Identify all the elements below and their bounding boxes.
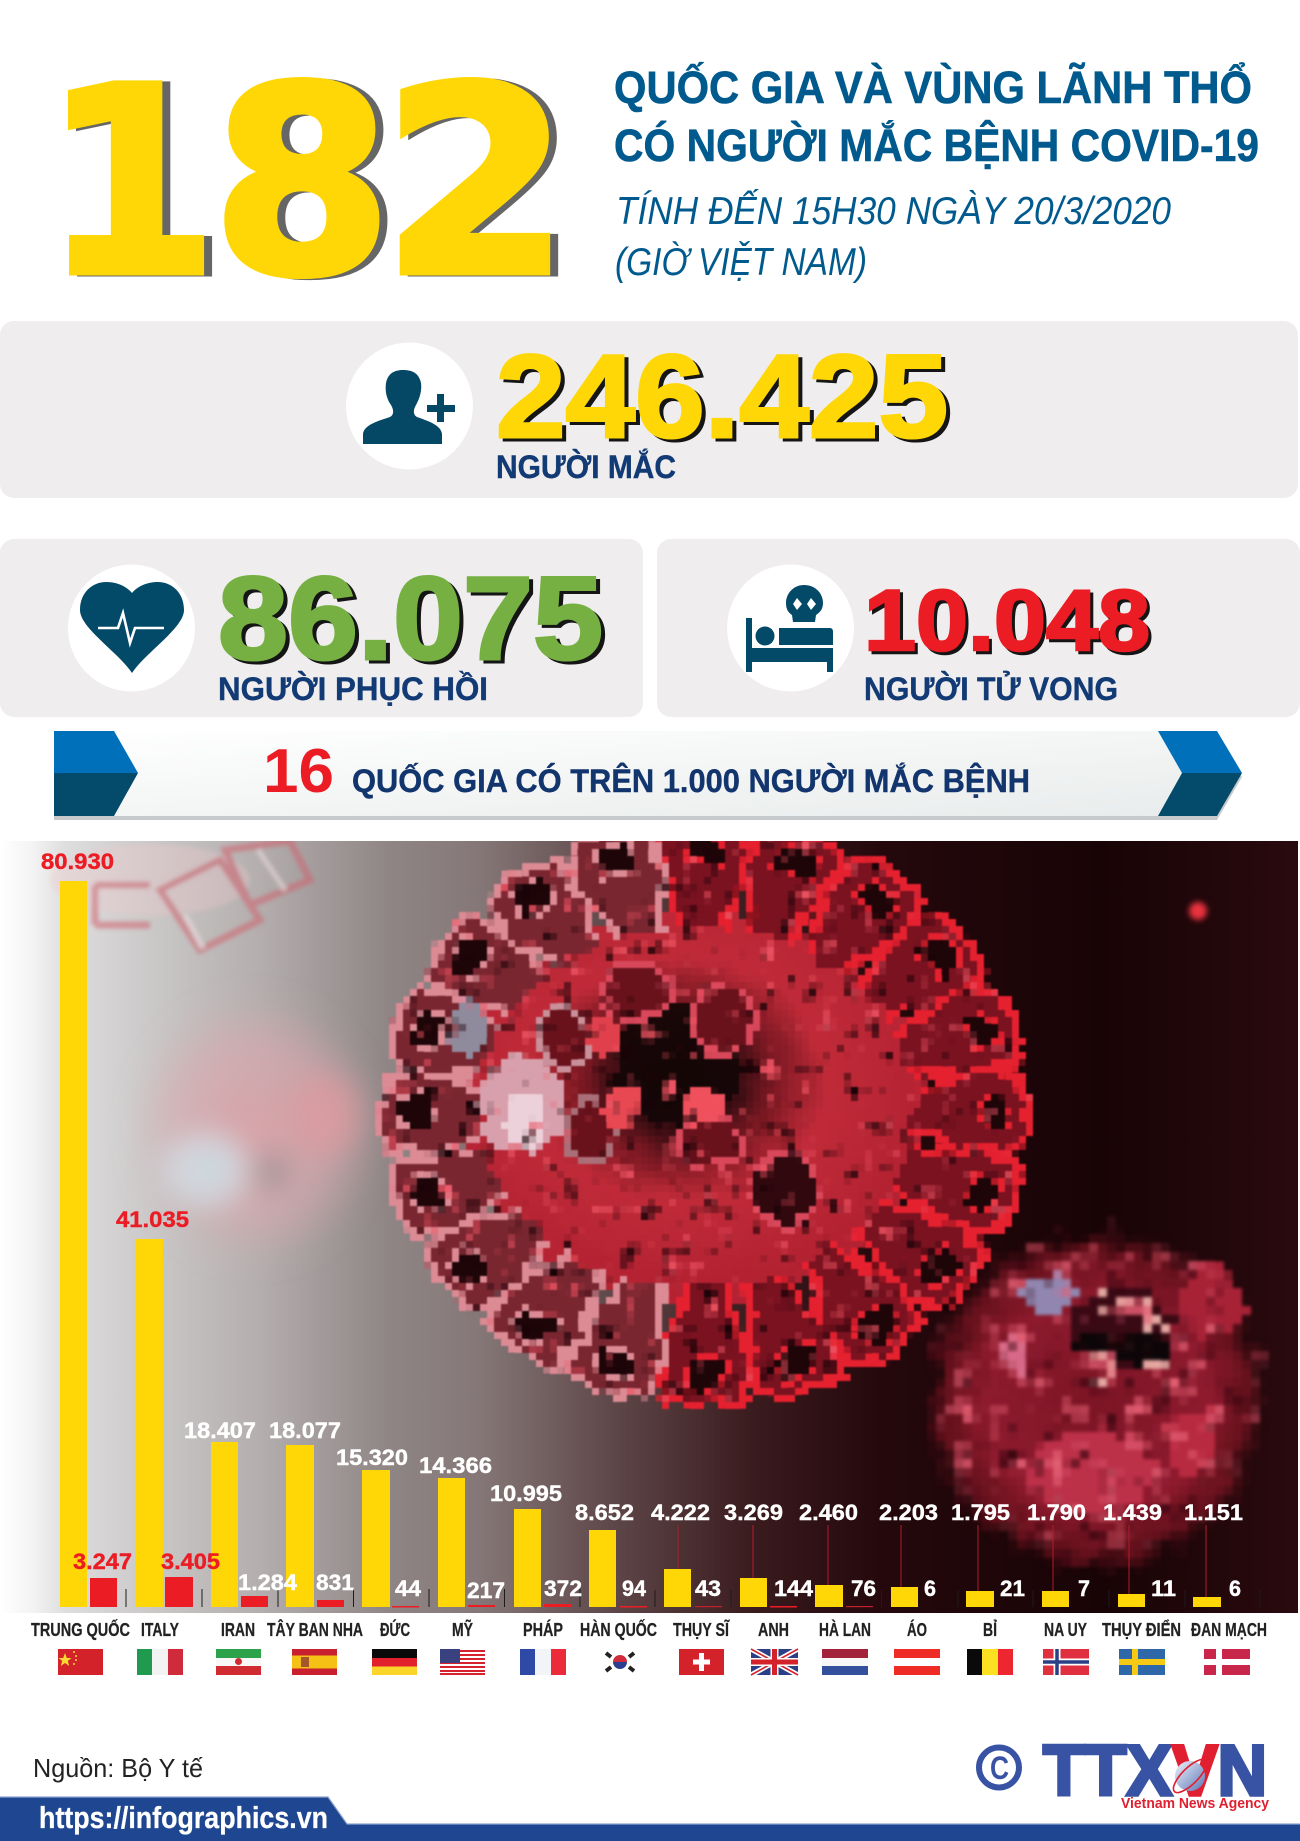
heading text block: QUỐC GIA VÀ VÙNG LÃNH THỔ	[614, 62, 1252, 113]
image: lower right virus	[923, 1228, 1267, 1572]
country labels: HÀ LAN	[819, 1619, 871, 1640]
footer bar	[0, 1797, 1300, 1841]
bar value labels: 1.790	[1027, 1500, 1086, 1525]
source text: Nguồn: Bộ Y tế	[33, 1753, 204, 1783]
virus centre	[612, 1008, 744, 1124]
bar value labels: 4.222	[651, 1500, 710, 1525]
country labels: ĐỨC	[380, 1619, 410, 1640]
bar value labels: 8.652	[575, 1500, 634, 1525]
flag: Sweden	[1119, 1649, 1165, 1675]
icon: globe	[1169, 1755, 1211, 1797]
panel: deaths	[657, 539, 1300, 717]
country labels	[31, 1619, 1267, 1640]
bar value labels: 18.077	[269, 1418, 341, 1443]
country labels: IRAN	[221, 1620, 255, 1640]
flag: Austria	[894, 1649, 940, 1675]
bar value labels: 41.035	[116, 1207, 189, 1232]
bar value labels: 43	[695, 1576, 721, 1601]
bar value labels: 44	[395, 1576, 422, 1601]
bar value labels: 6	[924, 1576, 936, 1601]
bar value labels: 1.284	[238, 1570, 298, 1595]
label: người tử vong: NGƯỜI TỬ VONG	[864, 671, 1118, 707]
panel: recovered	[0, 539, 643, 717]
bar value labels: 144	[774, 1576, 814, 1601]
big number 182: 2	[382, 33, 570, 333]
bar value labels: 10.995	[490, 1481, 562, 1506]
flag: Norway	[1043, 1649, 1089, 1675]
spikes: left side, pink	[382, 820, 691, 1404]
flag: Italy	[137, 1649, 183, 1675]
country labels: NA UY	[1044, 1620, 1087, 1640]
bright patches	[448, 998, 722, 1153]
bar value labels: 372	[544, 1576, 582, 1601]
bar value labels: 831	[316, 1570, 354, 1595]
spikes: right side, red	[658, 819, 1028, 1405]
icon: copyright: C	[990, 1750, 1009, 1786]
heading text block: TÍNH ĐẾN 15H30 NGÀY 20/3/2020	[616, 189, 1171, 233]
label: người mắc: NGƯỜI MẮC	[496, 449, 676, 485]
arrow: left chevron	[54, 731, 138, 816]
country labels: MỸ	[452, 1619, 473, 1640]
bars: confirmed and deaths	[60, 881, 1221, 1608]
virus surface	[477, 927, 914, 1288]
bar value labels: 1.439	[1103, 1500, 1162, 1525]
banner: 16 countries	[54, 731, 1242, 820]
bar value labels: 18.407	[184, 1418, 256, 1443]
bar value labels: 2.460	[799, 1500, 858, 1525]
image: main red virus	[382, 819, 1028, 1405]
icon: heart with pulse	[68, 564, 195, 692]
inner spikes	[541, 965, 818, 1226]
big number 182: 1	[43, 33, 218, 333]
country labels: HÀN QUỐC	[580, 1619, 657, 1640]
url text: https://infographics.vn	[39, 1800, 328, 1835]
bar value labels: 3.247	[73, 1549, 132, 1574]
flag: Denmark	[1204, 1649, 1250, 1675]
icon: copyright	[979, 1748, 1019, 1788]
icon: person plus	[346, 342, 473, 470]
country labels: ITALY	[141, 1620, 179, 1640]
number: 246.425: 246.425	[496, 331, 948, 463]
bar value labels: 11	[1151, 1576, 1176, 1601]
flag: Switzerland	[679, 1649, 724, 1675]
big number 182	[43, 33, 570, 333]
bar value labels: 76	[851, 1576, 876, 1601]
flag: South Korea	[597, 1649, 643, 1675]
bar value labels: 94	[622, 1576, 647, 1601]
number: 86.075: 86.075	[218, 553, 603, 685]
flag: China	[58, 1649, 103, 1675]
panel: total cases	[0, 321, 1298, 498]
bar value labels: 6	[1229, 1576, 1241, 1601]
flag: Iran	[216, 1649, 261, 1675]
bar value labels: 21	[1000, 1576, 1025, 1601]
bar value labels: 7	[1078, 1576, 1090, 1601]
bar value labels: 217	[467, 1578, 505, 1603]
bar chart	[41, 849, 1260, 1608]
country labels: PHÁP	[523, 1619, 563, 1640]
flag: Belgium	[967, 1649, 1013, 1675]
bar value labels	[41, 849, 1243, 1603]
country labels: THỤY SĨ	[673, 1619, 730, 1640]
bar value labels: 3.405	[161, 1549, 220, 1574]
big number 182: 8	[212, 33, 392, 333]
panel: virus image and chart	[0, 819, 1298, 1613]
icon: bed with skull	[727, 564, 854, 692]
image: blurred pink virus left	[152, 1013, 378, 1247]
flag: Netherlands	[822, 1649, 868, 1675]
country labels: ANH	[758, 1620, 789, 1640]
bar value labels: 14.366	[419, 1453, 492, 1478]
country labels: BỈ	[983, 1619, 997, 1640]
heading text block: (GIỜ VIỆT NAM)	[615, 241, 867, 284]
logo: TTXVN: TTXVN	[1043, 1732, 1267, 1811]
country labels: THỤY ĐIỂN	[1102, 1619, 1181, 1640]
image: small red particle	[1189, 902, 1207, 920]
country labels: ÁO	[907, 1619, 927, 1640]
bar value labels: 1.151	[1184, 1500, 1243, 1525]
flag: France	[520, 1649, 566, 1675]
heading text block	[614, 62, 1259, 284]
country labels: TÂY BAN NHA	[267, 1619, 363, 1640]
country labels: ĐAN MẠCH	[1191, 1620, 1267, 1640]
logo: TTXVN: Vietnam News Agency	[1121, 1795, 1270, 1812]
bar value labels: 3.269	[724, 1500, 783, 1525]
number: 16: 16	[263, 737, 334, 806]
arrow: right chevron	[1158, 731, 1242, 816]
flag: Spain	[292, 1649, 337, 1675]
flag: UK	[751, 1649, 798, 1675]
flag: Germany	[372, 1649, 417, 1675]
flags row	[58, 1649, 1250, 1675]
flag: USA	[440, 1649, 485, 1675]
bar value labels: 2.203	[879, 1500, 938, 1525]
country labels: TRUNG QUỐC	[31, 1619, 130, 1640]
bar value labels: 1.795	[951, 1500, 1010, 1525]
banner text: QUỐC GIA CÓ TRÊN 1.000 NGƯỜI MẮC BỆNH	[352, 763, 1030, 799]
image: faint virus top left	[50, 841, 310, 950]
bar value labels: 15.320	[336, 1445, 408, 1470]
label: người phục hồi: NGƯỜI PHỤC HỒI	[218, 671, 488, 707]
number: 10.048: 10.048	[864, 573, 1150, 669]
bar value labels: 80.930	[41, 849, 114, 874]
